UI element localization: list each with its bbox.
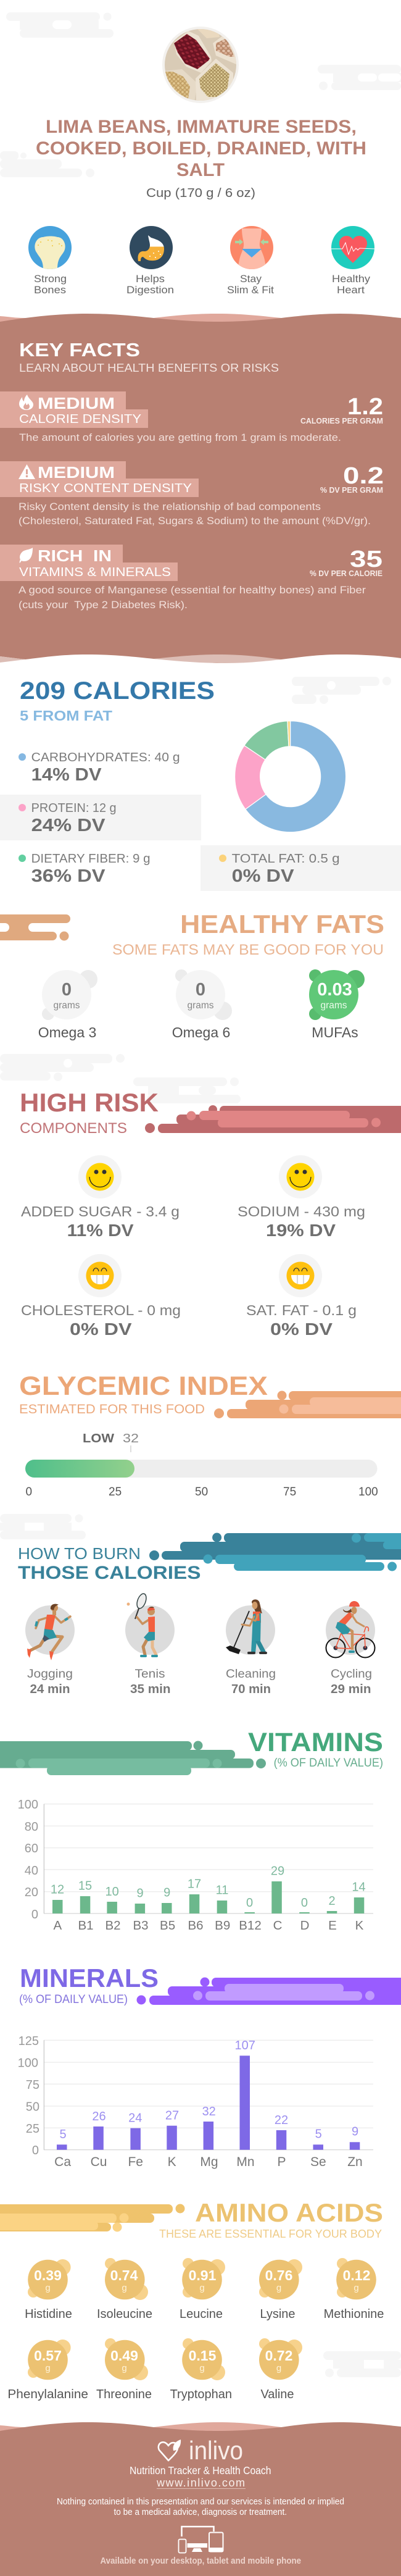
panel: footer (0, 2422, 401, 2576)
bar chart: vitamins: 0 (246, 1896, 253, 1910)
label: jogging: 24 min (30, 1683, 70, 1696)
panel: vitamins (0, 1728, 383, 1933)
label: healthy heart: Heart (337, 284, 365, 296)
omega 3: grams (53, 1000, 80, 1011)
isoleucine: Isoleucine (97, 2307, 152, 2321)
serving size: Cup (170 g / 6 oz) (146, 186, 255, 200)
panel: key facts (0, 314, 401, 663)
website link: www.inlivo.com (156, 2477, 245, 2489)
valine: g (276, 2363, 281, 2373)
omega 3 (38, 970, 97, 1040)
title: SALT (176, 160, 225, 180)
fact: rich in vitamins and minerals: VITAMINS & MINERALS (19, 565, 171, 579)
fact: rich in vitamins and minerals: RICH IN (38, 546, 112, 565)
bar chart: vitamins: 17 (188, 1878, 201, 1891)
icon: flame (19, 395, 33, 410)
label: digestion (126, 273, 174, 296)
bar chart: minerals: 125 (19, 2034, 39, 2048)
tryptophan: 0.15 (189, 2348, 217, 2364)
bar chart: vitamins: 100 (18, 1798, 38, 1812)
bar chart: vitamins (18, 1798, 373, 1933)
sodium: SODIUM - 430 mg (238, 1203, 365, 1219)
heading: THESE ARE ESSENTIAL FOR YOUR BODY (159, 2227, 382, 2240)
added sugar: 11% DV (67, 1221, 134, 1240)
label: digestion: Digestion (126, 284, 174, 296)
leucine (180, 2258, 225, 2321)
bar chart: vitamins: B12 (239, 1918, 262, 1933)
threonine: g (122, 2363, 127, 2373)
gauge scale: 100 (358, 1486, 378, 1499)
bar chart: minerals: 32 (202, 2105, 216, 2118)
tagline: Nutrition Tracker & Health Coach (130, 2464, 271, 2477)
bar chart: vitamins: 11 (216, 1884, 228, 1897)
bar chart: minerals: 75 (26, 2078, 39, 2092)
saturated fat: SAT. FAT - 0.1 g (246, 1302, 357, 1318)
bar chart: minerals: P (277, 2155, 286, 2169)
bar chart: minerals: Fe (128, 2155, 143, 2169)
omega 3: 0 (62, 980, 72, 1000)
label: strong bones (34, 273, 67, 296)
bar chart: vitamins: 14 (352, 1881, 366, 1894)
fact: risky content density: Risky Content density is the relationship of bad components (19, 501, 321, 512)
lysine: Lysine (260, 2307, 296, 2321)
gauge scale: 50 (195, 1486, 208, 1499)
fact: calorie density: CALORIES PER GRAM (300, 417, 383, 425)
heading (159, 2198, 383, 2240)
leucine: Leucine (180, 2307, 223, 2321)
legend: carbohydrates: 14% DV (31, 765, 102, 785)
gauge scale: 75 (283, 1486, 296, 1499)
title: LIMA BEANS, IMMATURE SEEDS, (46, 117, 357, 137)
cholesterol (21, 1254, 181, 1339)
heading (112, 910, 384, 958)
saturated fat (246, 1254, 357, 1339)
bar chart: vitamins: 80 (25, 1820, 38, 1834)
fact: risky content density: (Cholesterol, Saturated Fat, Sugars & Sodium) to the amount (%DV/gr). (19, 515, 371, 527)
logo: inlivo (189, 2436, 243, 2465)
legend: total fat (219, 852, 340, 886)
heading: AMINO ACIDS (195, 2198, 383, 2227)
lysine: g (276, 2283, 281, 2293)
fact: risky content density: % DV PER GRAM (320, 486, 383, 495)
sodium (238, 1155, 365, 1240)
label: tennis: 35 min (130, 1683, 170, 1696)
methionine (324, 2258, 384, 2321)
tryptophan: g (199, 2363, 205, 2373)
saturated fat: 0% DV (270, 1319, 333, 1339)
label: slim and fit: Slim & Fit (227, 284, 274, 296)
label: cleaning (226, 1668, 276, 1696)
bar chart: minerals: 5 (315, 2128, 322, 2141)
label: slim and fit: Stay (240, 273, 262, 285)
bar chart: vitamins: 40 (25, 1864, 38, 1878)
bar chart: minerals: Mn (236, 2155, 255, 2169)
activity: tennis (125, 1592, 175, 1657)
fact: calorie density: CALORIE DENSITY (19, 412, 141, 426)
bar chart: vitamins: 12 (51, 1883, 64, 1897)
bar chart: minerals: 22 (275, 2114, 288, 2127)
bar chart: minerals: 107 (235, 2039, 255, 2052)
fact: calorie density: MEDIUM (38, 394, 115, 412)
label: strong bones: Strong (34, 273, 67, 285)
legend: dietary fiber (19, 852, 151, 886)
cholesterol: 0% DV (70, 1319, 132, 1339)
added sugar (21, 1155, 180, 1240)
label: cycling (331, 1668, 372, 1696)
heading: KEY FACTS (19, 339, 140, 361)
logo (159, 2436, 243, 2465)
legend: protein: 24% DV (31, 816, 105, 835)
heading: 5 FROM FAT (20, 708, 113, 724)
valine: 0.72 (265, 2348, 292, 2364)
bar chart: minerals: Mg (200, 2155, 218, 2169)
heading: LEARN ABOUT HEALTH BENEFITS OR RISKS (19, 361, 279, 374)
bar chart: vitamins: 2 (328, 1894, 336, 1908)
bar chart: vitamins: 9 (136, 1887, 144, 1901)
legend: carbohydrates (19, 751, 180, 785)
title: COOKED, BOILED, DRAINED, WITH (36, 138, 366, 159)
threonine: 0.49 (110, 2348, 138, 2364)
fact: calorie density (0, 391, 383, 443)
activity: cleaning (226, 1599, 275, 1655)
bar chart: vitamins: B6 (188, 1918, 204, 1933)
omega 3: Omega 3 (38, 1024, 96, 1040)
fact: risky content density: 0.2 (343, 463, 384, 489)
bar chart: vitamins: E (328, 1918, 337, 1933)
icon: healthy heart (331, 226, 374, 269)
icon: strong bones (28, 226, 72, 269)
isoleucine (97, 2258, 152, 2321)
panel: calories (0, 677, 401, 891)
gauge value: LOW (83, 1432, 114, 1445)
methionine: Methionine (324, 2307, 384, 2321)
panel: high risk components (20, 1088, 401, 1339)
bar chart: vitamins: D (300, 1918, 309, 1933)
label: tennis: Tenis (134, 1668, 165, 1681)
histidine (25, 2259, 72, 2321)
label: jogging (27, 1668, 73, 1696)
legend: total fat: TOTAL FAT: 0.5 g (232, 852, 340, 866)
fact: risky content density: MEDIUM (38, 463, 115, 482)
heading: ESTIMATED FOR THIS FOOD (19, 1402, 205, 1416)
threonine (96, 2338, 152, 2401)
label: slim and fit (227, 273, 274, 296)
heading: SOME FATS MAY BE GOOD FOR YOU (112, 942, 384, 958)
bar chart: vitamins: 20 (25, 1886, 38, 1899)
bar chart: minerals: K (168, 2155, 176, 2169)
legend: dietary fiber: DIETARY FIBER: 9 g (31, 852, 151, 866)
bar chart: vitamins: 9 (163, 1886, 170, 1900)
sodium: 19% DV (266, 1221, 336, 1240)
label: cycling: 29 min (331, 1683, 371, 1696)
tryptophan: Tryptophan (170, 2388, 232, 2401)
heading (18, 1545, 201, 1583)
bar chart: minerals: 100 (18, 2057, 38, 2070)
bar chart: vitamins: 15 (78, 1880, 92, 1893)
icon: digestion (130, 226, 173, 269)
heading (20, 677, 215, 724)
icon: slim and fit (230, 226, 273, 272)
bar chart: minerals: Zn (347, 2155, 363, 2169)
heading: HOW TO BURN (18, 1545, 141, 1563)
heading: HIGH RISK (20, 1088, 159, 1117)
heading: (% OF DAILY VALUE) (274, 1757, 383, 1770)
heading: 209 CALORIES (20, 677, 215, 705)
disclaimer: Nothing contained in this presentation and our services is intended or implied (57, 2496, 344, 2507)
bar chart: vitamins: 10 (105, 1885, 119, 1899)
label: tennis (130, 1668, 170, 1696)
gauge scale (26, 1486, 378, 1499)
title (36, 117, 366, 180)
heading (19, 1371, 268, 1416)
fact: risky content density (0, 461, 384, 527)
phenylalanine: g (45, 2363, 51, 2373)
bar chart: vitamins: A (53, 1918, 62, 1933)
disclaimer (57, 2496, 344, 2517)
fact: rich in vitamins and minerals: 35 (350, 546, 382, 572)
histidine: g (45, 2283, 51, 2293)
bar chart: minerals: 26 (92, 2110, 106, 2123)
panel: glycemic index (19, 1371, 401, 1499)
bar chart: vitamins: C (273, 1918, 283, 1933)
leucine: g (199, 2283, 205, 2293)
panel: amino acids (0, 2198, 384, 2401)
bar chart: minerals: 27 (165, 2109, 179, 2123)
donut chart (235, 721, 346, 832)
bar chart: vitamins: 60 (25, 1842, 38, 1855)
panel: how to burn those calories (18, 1533, 401, 1696)
isoleucine: g (122, 2283, 127, 2293)
activity: cycling (326, 1601, 375, 1657)
bar chart: vitamins: B9 (215, 1918, 230, 1933)
cholesterol: CHOLESTEROL - 0 mg (21, 1302, 181, 1318)
tryptophan (170, 2338, 232, 2401)
gauge bar (25, 1460, 378, 1478)
label: cleaning: Cleaning (226, 1668, 276, 1681)
icon: leaf (20, 548, 33, 563)
heading (19, 1963, 159, 2006)
heading: HEALTHY FATS (180, 910, 384, 939)
legend: total fat: 0% DV (232, 866, 294, 886)
bar chart: vitamins: K (355, 1918, 364, 1933)
label: healthy heart (332, 273, 371, 296)
food photo: bags of beans (162, 26, 239, 104)
label: strong bones: Bones (34, 284, 66, 296)
heading (248, 1728, 383, 1770)
bar chart: vitamins: 0 (31, 1908, 38, 1922)
icon: warning (19, 464, 35, 479)
bar chart: minerals (18, 2034, 373, 2169)
threonine: Threonine (96, 2388, 152, 2401)
phenylalanine: Phenylalanine (7, 2388, 88, 2401)
label: healthy heart: Healthy (332, 273, 371, 285)
bar chart: minerals: 25 (26, 2122, 39, 2136)
lysine (259, 2259, 302, 2321)
heading: VITAMINS (248, 1728, 383, 1757)
bar chart: minerals: Ca (54, 2155, 71, 2169)
panel: healthy fats (0, 910, 384, 1040)
fact: calorie density: The amount of calories you are getting from 1 gram is moderate. (19, 432, 341, 443)
bar chart: vitamins: B1 (78, 1918, 94, 1933)
omega 6: Omega 6 (172, 1024, 230, 1040)
mufas: grams (320, 1000, 347, 1011)
fact: rich in vitamins and minerals: % DV PER CALORIE (310, 569, 382, 578)
label: cycling: Cycling (331, 1668, 372, 1681)
omega 6 (172, 969, 232, 1040)
mufas: 0.03 (317, 980, 352, 1000)
fact: risky content density: RISKY CONTENT DENSITY (19, 481, 192, 495)
bar chart: minerals: 50 (26, 2101, 39, 2114)
phenylalanine (7, 2340, 88, 2401)
bar chart: minerals: 5 (59, 2128, 67, 2141)
heading: THOSE CALORIES (18, 1563, 201, 1583)
histidine: Histidine (25, 2307, 72, 2321)
heading: MINERALS (20, 1963, 159, 1993)
disclaimer: to be a medical advice, diagnosis or treatment. (114, 2507, 287, 2517)
label: jogging: Jogging (27, 1668, 73, 1681)
legend: protein: PROTEIN: 12 g (31, 801, 117, 815)
lysine: 0.76 (265, 2267, 292, 2283)
heading (20, 1088, 159, 1137)
gauge scale: 25 (109, 1486, 122, 1499)
gauge scale: 0 (26, 1486, 32, 1499)
heading: (% OF DAILY VALUE) (19, 1993, 128, 2006)
omega 6: 0 (196, 980, 205, 1000)
omega 6: grams (187, 1000, 214, 1011)
label: cleaning: 70 min (231, 1683, 271, 1696)
methionine: g (353, 2283, 359, 2293)
icon: devices (179, 2527, 223, 2553)
legend: dietary fiber: 36% DV (31, 866, 105, 886)
valine: Valine (260, 2388, 294, 2401)
bar chart: minerals: 24 (128, 2112, 142, 2125)
methionine: 0.12 (343, 2267, 370, 2283)
bar chart: vitamins: B3 (133, 1918, 149, 1933)
availability note: Available on your desktop, tablet and mobile phone (100, 2556, 301, 2566)
added sugar: ADDED SUGAR - 3.4 g (21, 1203, 180, 1219)
panel: minerals (18, 1963, 401, 2169)
heading: COMPONENTS (20, 1120, 127, 1137)
bar chart: vitamins: B5 (160, 1918, 175, 1933)
fact: rich in vitamins and minerals: A good source of Manganese (essential for healthy bones) and Fiber (19, 584, 366, 596)
gauge value (83, 1432, 139, 1452)
heading: GLYCEMIC INDEX (19, 1371, 268, 1401)
mufas: MUFAs (312, 1024, 358, 1040)
fact: rich in vitamins and minerals (0, 545, 382, 611)
mufas (309, 969, 365, 1040)
valine (259, 2338, 302, 2401)
fact: calorie density: 1.2 (347, 394, 383, 420)
gauge value: 32 (123, 1432, 139, 1445)
isoleucine: 0.74 (110, 2267, 138, 2283)
phenylalanine: 0.57 (34, 2348, 62, 2364)
bar chart: minerals: 9 (352, 2125, 358, 2139)
bar chart: minerals: Se (310, 2155, 326, 2169)
leucine: 0.91 (189, 2267, 217, 2283)
activity: jogging (25, 1604, 75, 1660)
histidine: 0.39 (34, 2267, 62, 2283)
bar chart: minerals: Cu (91, 2155, 107, 2169)
bar chart: vitamins: 0 (301, 1896, 308, 1910)
bar chart: vitamins: B2 (105, 1918, 121, 1933)
bar chart: vitamins: 29 (271, 1865, 284, 1878)
legend: protein (19, 801, 117, 835)
legend: carbohydrates: CARBOHYDRATES: 40 g (31, 751, 180, 764)
heading (19, 339, 279, 374)
label: digestion: Helps (136, 273, 165, 285)
fact: rich in vitamins and minerals: (cuts your Type 2 Diabetes Risk). (19, 599, 188, 611)
benefit icons (28, 226, 374, 296)
bar chart: minerals: 0 (32, 2144, 39, 2157)
